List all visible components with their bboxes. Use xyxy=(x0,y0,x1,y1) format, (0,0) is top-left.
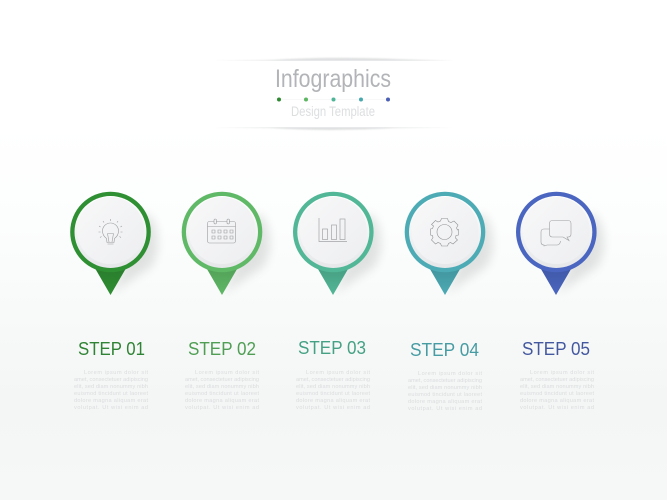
pin shadow xyxy=(112,215,158,294)
step 3 text: euismod tincidunt ut laoreet xyxy=(296,391,370,397)
step 2 pin xyxy=(182,192,270,295)
pointer shade xyxy=(204,263,240,295)
white lip xyxy=(186,196,258,268)
step 5 text xyxy=(520,370,594,411)
pin pointer xyxy=(426,263,464,295)
step 1 text: volutpat. Ut wisi enim ad xyxy=(74,405,148,411)
step 1 text: dolore magna aliquam erat xyxy=(74,398,148,404)
step 5 text: elit, sed diam nonummy nibh xyxy=(520,384,594,390)
plaque bottom edge xyxy=(212,127,455,130)
pin shadow xyxy=(558,215,604,294)
step 5 pin xyxy=(516,192,604,295)
step 3 pin xyxy=(293,192,381,295)
white lip xyxy=(520,196,592,268)
step 3 text: Lorem ipsum dolor sit xyxy=(306,370,370,376)
step 1 text: Lorem ipsum dolor sit xyxy=(84,370,148,376)
plaque body xyxy=(205,61,462,127)
step 4 text xyxy=(408,371,482,412)
white lip xyxy=(409,196,481,268)
icon: calendar xyxy=(208,219,236,243)
step 2 heading: STEP 02 xyxy=(188,339,256,359)
pin shadow xyxy=(447,215,493,294)
pin pointer xyxy=(538,263,574,295)
pin ring xyxy=(293,192,374,272)
pin pointer xyxy=(92,263,129,295)
step 2 text: dolore magna aliquam erat xyxy=(185,398,259,404)
face xyxy=(412,197,478,264)
step 1 text: elit, sed diam nonummy nibh xyxy=(74,384,148,390)
icon: gear xyxy=(430,218,458,246)
white lip xyxy=(74,196,146,268)
step 5 text: Lorem ipsum dolor sit xyxy=(530,370,594,376)
subtitle: Design Template xyxy=(291,104,375,119)
step 1 text: amet, consectetuer adipiscing xyxy=(74,377,148,383)
pin ring xyxy=(70,192,151,272)
face xyxy=(523,197,590,264)
step 4 text: Lorem ipsum dolor sit xyxy=(418,371,482,377)
step 4 text: elit, sed diam nonummy nibh xyxy=(408,385,482,391)
step 2 text: Lorem ipsum dolor sit xyxy=(195,370,259,376)
step 4 text: euismod tincidunt ut laoreet xyxy=(408,392,482,398)
pointer shade xyxy=(426,263,464,295)
step 4 pin xyxy=(405,192,493,295)
face xyxy=(188,197,256,264)
face xyxy=(300,197,367,264)
pin ring xyxy=(405,192,485,272)
step 3 text: dolore magna aliquam erat xyxy=(296,398,370,404)
pointer shade xyxy=(538,263,574,295)
step 5 text: volutpat. Ut wisi enim ad xyxy=(520,405,594,411)
pin ring xyxy=(516,192,597,272)
step 3 text xyxy=(296,370,370,411)
pin ring xyxy=(182,192,262,272)
step 1 pin xyxy=(70,192,158,295)
step 2 text: elit, sed diam nonummy nibh xyxy=(185,384,259,390)
step 3 text: elit, sed diam nonummy nibh xyxy=(296,384,370,390)
step 1 text xyxy=(74,370,148,411)
step 2 text: volutpat. Ut wisi enim ad xyxy=(185,405,259,411)
step 2 text: euismod tincidunt ut laoreet xyxy=(185,391,259,397)
step 2 text xyxy=(185,370,259,411)
dot connector line and dots xyxy=(277,98,390,102)
plaque top edge xyxy=(212,58,455,61)
title: Infographics xyxy=(275,65,391,93)
pin shadow xyxy=(335,215,381,294)
pin pointer xyxy=(204,263,240,295)
pointer shade xyxy=(314,263,352,295)
step 3 heading: STEP 03 xyxy=(298,338,366,358)
title plaque xyxy=(205,58,462,130)
step 1 text: euismod tincidunt ut laoreet xyxy=(74,391,148,397)
step 5 text: amet, consectetuer adipiscing xyxy=(520,377,594,383)
step 4 heading: STEP 04 xyxy=(410,340,479,360)
step 5 heading: STEP 05 xyxy=(522,339,590,359)
step 4 text: dolore magna aliquam erat xyxy=(408,399,482,405)
step 4 text: amet, consectetuer adipiscing xyxy=(408,378,482,384)
step 2 text: amet, consectetuer adipiscing xyxy=(185,377,259,383)
icon: bar chart xyxy=(319,218,347,242)
step 3 text: amet, consectetuer adipiscing xyxy=(296,377,370,383)
face xyxy=(77,197,144,264)
step 1 heading: STEP 01 xyxy=(78,339,145,359)
pin pointer xyxy=(314,263,352,295)
step 4 text: volutpat. Ut wisi enim ad xyxy=(408,406,482,412)
step 5 text: dolore magna aliquam erat xyxy=(520,398,594,404)
icon: light bulb xyxy=(98,219,122,244)
step 3 text: volutpat. Ut wisi enim ad xyxy=(296,405,370,411)
step 5 text: euismod tincidunt ut laoreet xyxy=(520,391,594,397)
white lip xyxy=(297,196,369,268)
pointer shade xyxy=(92,263,129,295)
pin shadow xyxy=(224,215,270,294)
icon: speech bubbles xyxy=(541,220,571,246)
